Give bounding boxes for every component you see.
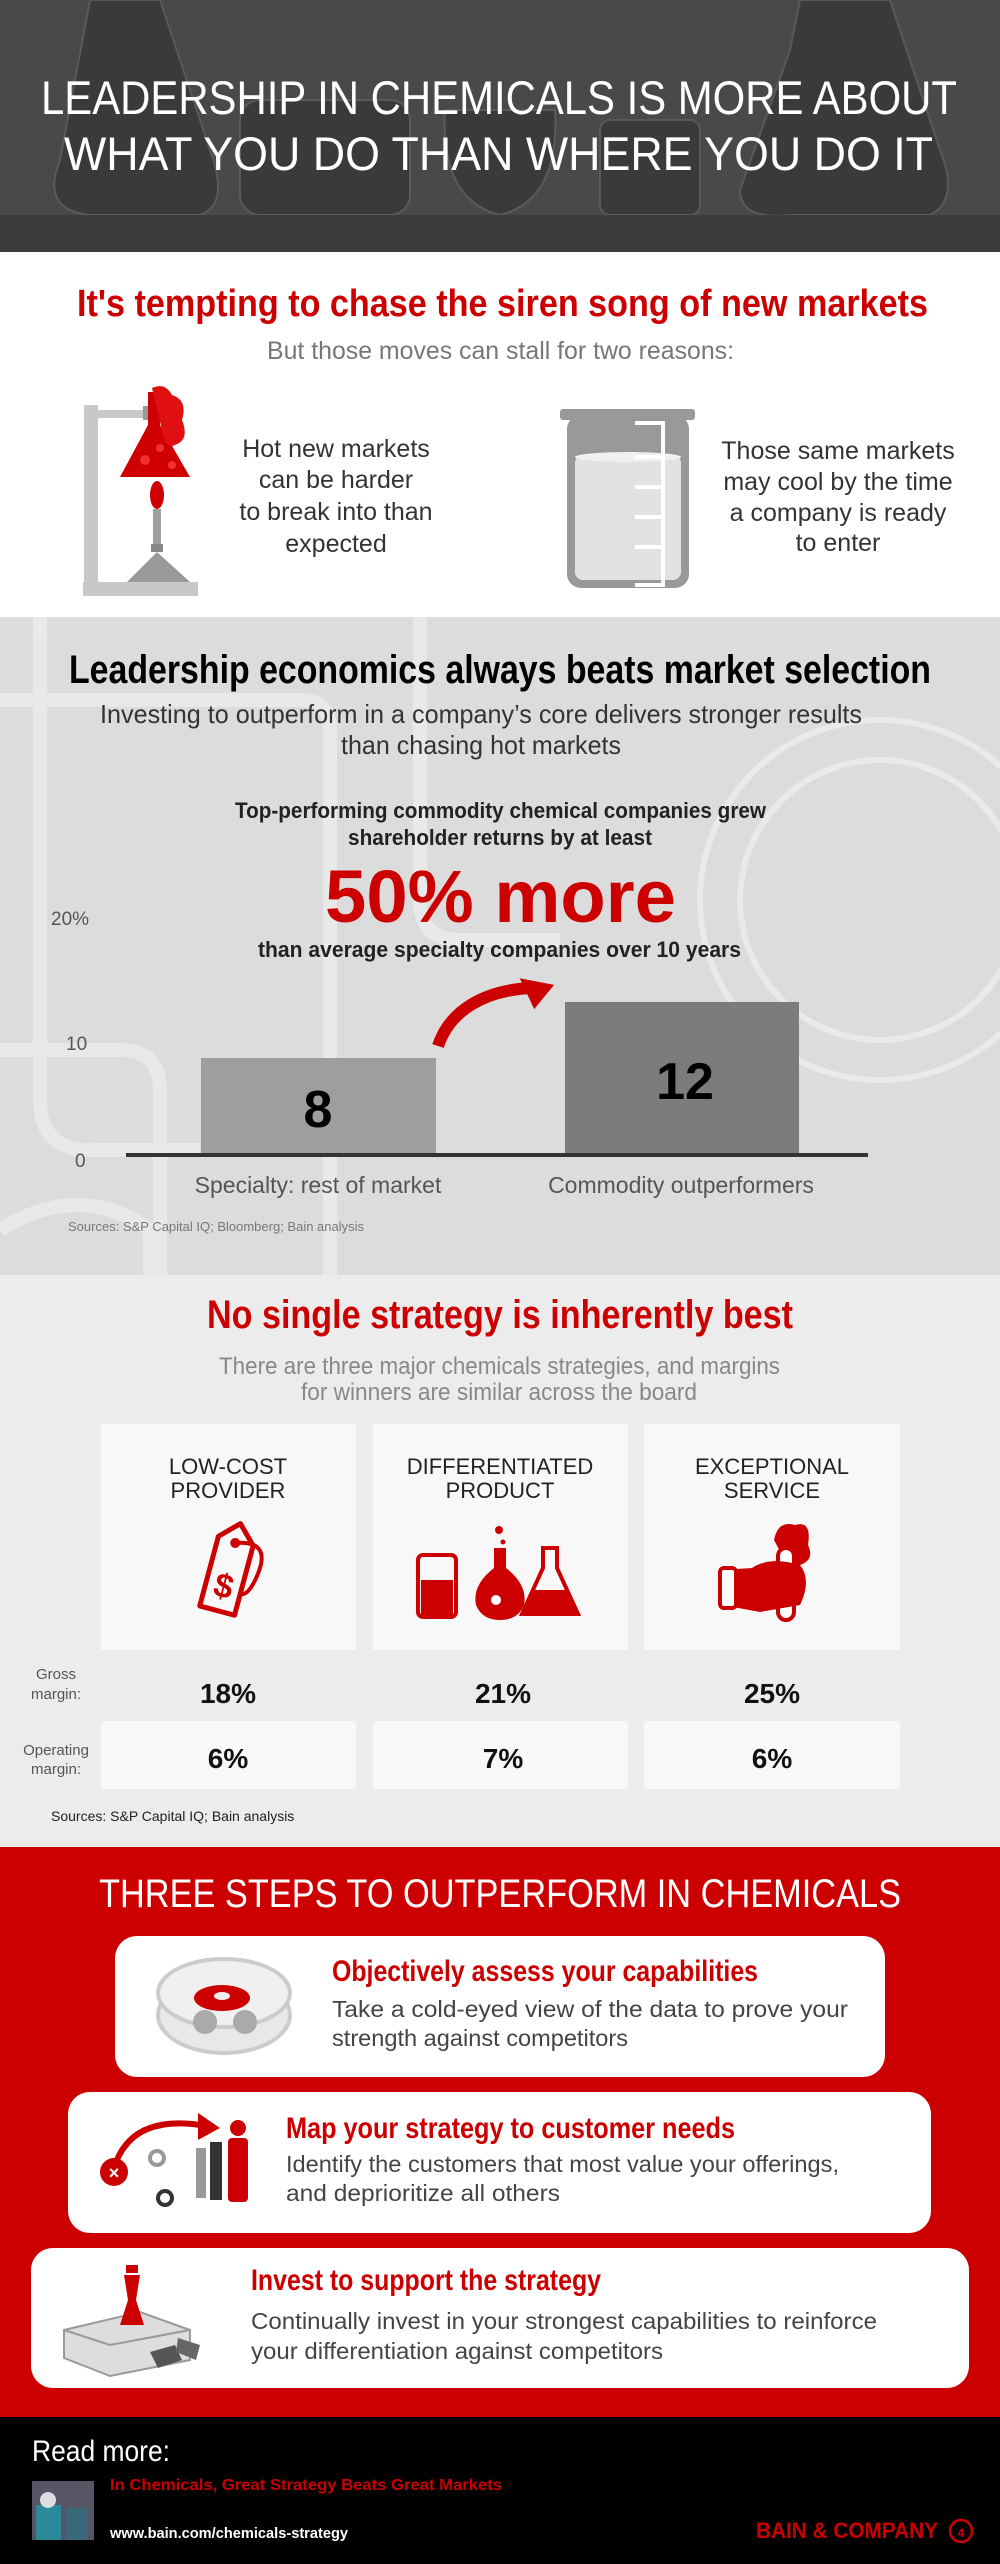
card: differentiated product bbox=[373, 1424, 628, 1650]
panel: leadership economics bbox=[0, 617, 1000, 1275]
step card 2: Map your strategy to customer needs bbox=[286, 2112, 735, 2145]
arrow bbox=[438, 968, 560, 1046]
icon: price tag: $ bbox=[210, 1566, 238, 1607]
card: low-cost provider: LOW-COST bbox=[169, 1454, 287, 1479]
text: markets may cool: a company is ready bbox=[730, 499, 947, 527]
icon: flasks bbox=[418, 1526, 578, 1620]
icon: price tag bbox=[200, 1519, 270, 1618]
text: markets may cool: may cool by the time bbox=[723, 468, 953, 496]
bar chart: 12 bbox=[656, 1053, 714, 1111]
margin table: 18% bbox=[200, 1678, 256, 1709]
bar chart: 10 bbox=[66, 1034, 87, 1055]
bar chart: Specialty: rest of market bbox=[195, 1172, 442, 1198]
subheading: investing bbox=[100, 699, 862, 760]
text: markets may cool: Those same markets bbox=[721, 437, 955, 465]
heading: no single strategy: No single strategy is inherently best bbox=[207, 1293, 793, 1337]
text: hot new markets: expected bbox=[285, 530, 387, 558]
step card 3: your differentiation against competitors bbox=[251, 2338, 663, 2364]
logo: BAIN & COMPANY bbox=[756, 2518, 938, 2543]
step card 1: Objectively assess your capabilities bbox=[332, 1955, 758, 1988]
link: In Chemicals, Great Strategy Beats Great Markets bbox=[110, 2477, 502, 2494]
subheading: three strategies bbox=[219, 1353, 780, 1406]
bar chart: Commodity outperformers bbox=[548, 1172, 814, 1198]
footer bbox=[0, 2417, 1000, 2564]
card: exceptional service: EXCEPTIONAL bbox=[695, 1454, 849, 1479]
text: hot new markets: Hot new markets bbox=[242, 435, 430, 463]
text: hot new markets bbox=[239, 435, 433, 558]
step card 1 bbox=[115, 1936, 885, 2077]
callout: 50% more: than average specialty companies over 10 years bbox=[258, 937, 741, 962]
icon: customers: × bbox=[109, 2163, 119, 2183]
step card 3: Invest to support the strategy bbox=[251, 2264, 601, 2297]
sources: margins: Sources: S&P Capital IQ; Bain analysis bbox=[51, 1808, 294, 1824]
bar chart: 20% bbox=[51, 909, 89, 930]
margin table: 6% bbox=[752, 1743, 792, 1774]
text: markets may cool: to enter bbox=[796, 529, 880, 557]
card: low-cost provider: PROVIDER bbox=[171, 1478, 285, 1503]
title bbox=[41, 71, 957, 180]
card: exceptional service bbox=[644, 1424, 900, 1650]
panel: strategies bbox=[0, 1275, 1000, 1847]
step card 1: Take a cold-eyed view of the data to prove your bbox=[332, 1996, 848, 2022]
text: markets may cool bbox=[721, 437, 955, 557]
read more: Read more: bbox=[32, 2435, 170, 2468]
step card 3 bbox=[31, 2248, 969, 2388]
bar chart bbox=[51, 909, 868, 1198]
margin table: Gross bbox=[36, 1666, 76, 1683]
card: exceptional service: SERVICE bbox=[724, 1478, 820, 1503]
margin table: 25% bbox=[744, 1678, 800, 1709]
step card 1: strength against competitors bbox=[332, 2025, 628, 2051]
heading: siren song: It's tempting to chase the siren song of new markets bbox=[77, 283, 928, 325]
subheading: But those moves can stall for two reasons: bbox=[267, 337, 734, 365]
icon: chess king on money bbox=[64, 2265, 200, 2376]
footer: www.bain.com/chemicals-strategy bbox=[109, 2525, 349, 2542]
subheading: investing: Investing to outperform in a company’s core delivers stronger results bbox=[100, 699, 862, 729]
bar chart: 0 bbox=[75, 1151, 86, 1172]
margin table: margin: bbox=[31, 1761, 81, 1778]
step card 2 bbox=[68, 2092, 931, 2233]
icon: hand holding tube bbox=[720, 1524, 810, 1620]
callout: 50% more: 50% more bbox=[325, 855, 676, 938]
callout: 50% more: shareholder returns by at least bbox=[348, 825, 653, 850]
margin table: Operating bbox=[23, 1742, 89, 1759]
step card 3: Continually invest in your strongest capabilities to reinforce bbox=[251, 2308, 877, 2334]
header banner bbox=[0, 0, 1000, 252]
logo: 4 bbox=[958, 2526, 965, 2540]
title: WHAT YOU DO THAN WHERE YOU DO IT bbox=[64, 127, 933, 180]
bar chart: 8 bbox=[304, 1081, 332, 1139]
margin table: 6% bbox=[208, 1743, 248, 1774]
margin table: 7% bbox=[483, 1743, 523, 1774]
step card 2: and deprioritize all others bbox=[286, 2180, 560, 2206]
step card 2: Identify the customers that most value your offerings, bbox=[286, 2151, 839, 2177]
subheading: three strategies: There are three major chemicals strategies, and margins bbox=[219, 1353, 780, 1380]
icon: flask on burner bbox=[83, 386, 198, 596]
subheading: investing: than chasing hot markets bbox=[341, 730, 621, 760]
margin table: margin: bbox=[31, 1686, 81, 1703]
panel: three steps bbox=[0, 1847, 1000, 2417]
margin table bbox=[23, 1666, 900, 1789]
margin table: 21% bbox=[475, 1678, 531, 1709]
card: low-cost provider bbox=[101, 1424, 356, 1650]
icon: cooling beaker bbox=[560, 409, 695, 588]
card: differentiated product: PRODUCT bbox=[446, 1478, 554, 1503]
icon: customers bbox=[100, 2113, 248, 2205]
text: hot new markets: to break into than bbox=[239, 498, 433, 526]
sources: chart: Sources: S&P Capital IQ; Bloomberg; Bain analysis bbox=[68, 1219, 365, 1234]
icon: petri dish with gears bbox=[158, 1959, 290, 2053]
callout: 50% more bbox=[235, 798, 767, 962]
subheading: three strategies: for winners are similar across the board bbox=[301, 1379, 697, 1406]
text: hot new markets: can be harder bbox=[259, 466, 413, 494]
card: differentiated product: DIFFERENTIATED bbox=[407, 1454, 593, 1479]
thumbnail bbox=[32, 2481, 94, 2540]
callout: 50% more: Top-performing commodity chemical companies grew bbox=[235, 798, 767, 823]
